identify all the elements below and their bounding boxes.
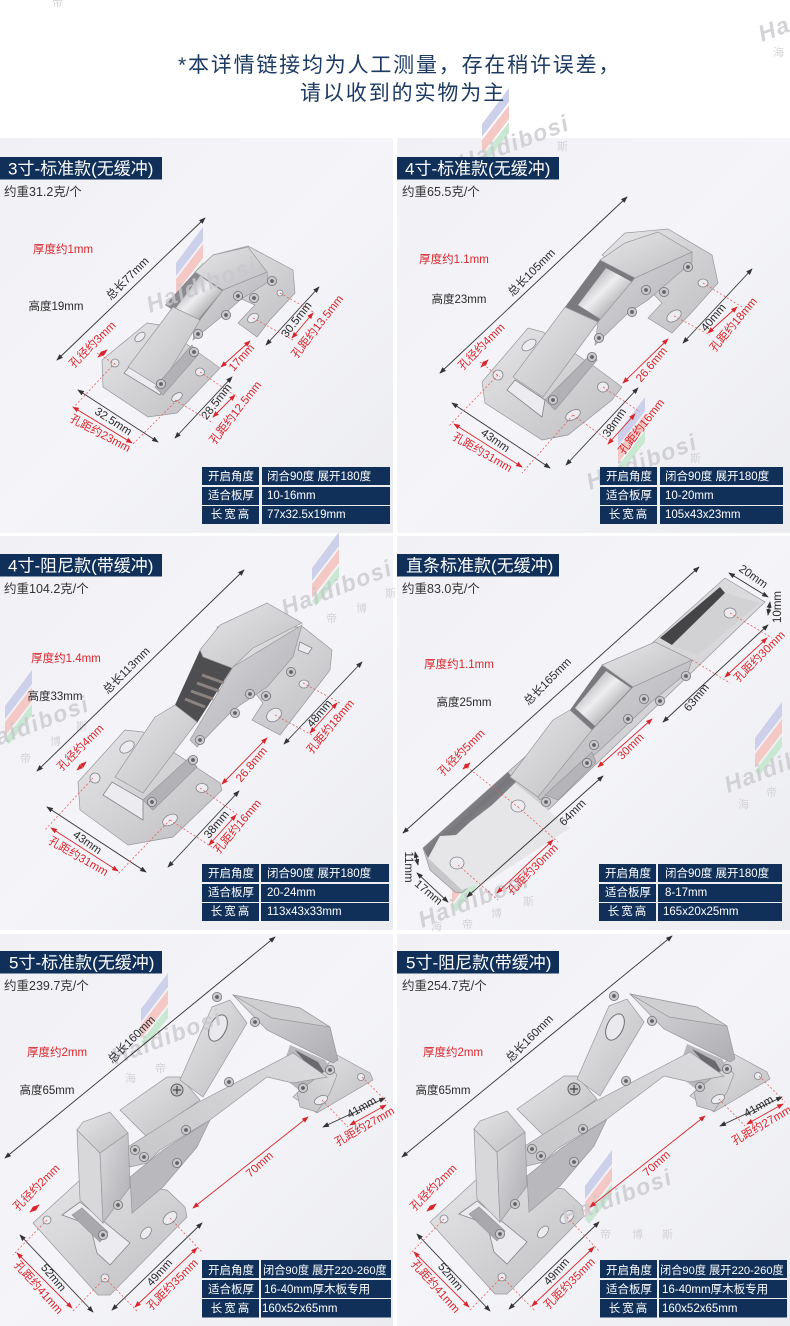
watermark text: Haidibosi [582,428,701,495]
spec table: 长宽高 [211,904,251,918]
spec table: 闭合90度 展开180度 [267,469,372,483]
dimension labels: 孔径约4mm [54,721,107,774]
dimension labels: 41mm [345,1095,379,1121]
dimension labels: 孔距约30mm [504,841,561,898]
panel: 5寸 standard [0,934,397,1326]
dimension lines [403,567,772,902]
dimension labels: 52mm [38,1262,68,1294]
dimension labels: 64mm [557,797,589,829]
dimension lines [440,197,752,473]
thickness and height labels: 厚度约1.1mm [419,252,489,266]
thickness and height labels: 高度65mm [416,1083,470,1097]
spec table: 10-16mm [267,490,316,502]
dimension labels: 孔距约16mm [615,396,667,457]
dimension labels: 26.6mm [634,345,670,385]
watermarks: 海 [431,919,442,933]
dimension labels: 孔径约2mm [10,1161,63,1214]
dimension labels: 17mm [412,878,444,908]
thickness and height labels: 厚度约1.4mm [31,651,101,665]
spec table: 开启角度 [208,866,254,880]
dimension labels: 43mm [478,427,512,455]
spec table: 适合板厚 [606,1282,652,1296]
watermark: 斯 [662,1228,673,1241]
spec table [600,1260,787,1318]
watermarks: Haidibosi [414,866,533,933]
spec table: 长宽高 [211,507,251,521]
spec table: 适合板厚 [606,488,652,502]
spec table: 适合板厚 [605,885,651,899]
thickness and height labels [28,651,101,703]
spec table: 闭合90度 展开180度 [665,469,770,483]
watermark: top corners [52,0,790,59]
dimension labels: 49mm [145,1257,175,1289]
dimension labels: 10mm [772,591,784,623]
watermark stripes [176,227,203,301]
watermark stripes: 海 [125,1071,136,1085]
heading note: *本详情链接均为人工测量，存在稍许误差， [178,54,621,77]
thickness and height labels [20,1045,87,1097]
weight: 约重239.7克/个 [4,978,89,993]
dimension labels: 孔距约31mm [46,833,111,879]
spec table: 165x20x25mm [663,906,738,918]
spec table: 160x52x65mm [262,1303,337,1315]
watermarks [414,702,790,933]
dimension labels: 28.5mm [200,382,235,422]
spec table: 长宽高 [609,1301,649,1315]
title bar: 3寸-标准款(无缓冲) [8,160,153,178]
title bar: 5寸-标准款(无缓冲) [9,954,154,972]
thickness and height labels [29,242,93,313]
weight: 约重31.2克/个 [4,184,82,199]
thickness and height labels: 高度33mm [28,689,82,703]
watermark: top over panel edge: Haidibosi [454,109,573,176]
watermarks: 帝 [20,751,31,765]
dimension labels: 20mm [736,563,770,591]
panel: 5寸 damping [397,934,790,1326]
dimension labels: 70mm [641,1149,673,1179]
dimension lines [402,936,785,1311]
watermark: top over panel edge: 斯 [557,140,568,153]
dimension labels: 孔距约16mm [211,796,264,856]
spec table: 16-40mm厚木板专用 [264,1282,370,1296]
dimension labels: 孔径约5mm [435,726,488,779]
weight: 约重254.7克/个 [402,978,487,993]
spec table: 8-17mm [665,887,707,899]
dimension labels: 孔距约41mm [11,1258,66,1317]
thickness and height labels: 高度23mm [432,292,486,306]
dimension labels: 总长165mm [521,655,574,708]
watermarks: 博 [50,735,61,748]
spec table [202,467,390,524]
dimension labels: 总长113mm [100,644,153,697]
dimension labels: 41mm [742,1094,776,1120]
dimension labels: 孔距约13.5mm [288,292,346,361]
spec table: 160x52x65mm [662,1303,737,1315]
dimension labels: 48mm [305,698,335,730]
dimension labels: 孔距约12.5mm [206,378,264,447]
watermark: 帝 [600,1227,611,1241]
dimension labels: 总长160mm [105,1013,158,1066]
watermark stripes: 帝 [155,1061,166,1075]
dimension labels: 49mm [542,1256,572,1288]
watermark text: Haidibosi [107,1003,226,1070]
hinge photo [33,992,373,1295]
spec table: 开启角度 [605,866,651,880]
thickness and height labels: 厚度约1mm [33,242,93,256]
dimension labels: 孔距约27mm [332,1103,397,1149]
thickness and height labels: 高度19mm [29,299,83,313]
spec table: 77x32.5x19mm [267,509,346,521]
watermark stripes [125,973,168,1085]
spec table: 20-24mm [267,887,316,899]
dimension labels: 孔径约3mm [66,318,119,371]
dimension labels: 52mm [435,1261,465,1293]
dimension labels: 43mm [70,829,104,857]
heading note [178,54,621,105]
spec table: 闭合90度 展开180度 [267,866,372,880]
watermark text: Haidibosi [142,251,261,318]
dimension labels: 38mm [202,809,232,841]
weight: 约重104.2克/个 [4,581,89,596]
dimension labels: 63mm [682,682,712,714]
panel: 4寸 damping [0,532,396,930]
weight: 约重83.0克/个 [402,581,480,596]
dimension labels: 30.5mm [280,300,315,340]
dimension labels [46,644,357,879]
thickness and height labels: 高度65mm [20,1083,74,1097]
dimension lines [37,570,362,875]
spec table: 10-20mm [665,490,714,502]
watermarks [0,532,396,765]
watermarks: 帝 [326,611,337,625]
watermarks: 帝 [766,785,777,799]
dimension labels: 孔距约35mm [144,1256,201,1313]
thickness and height labels [424,657,494,709]
spec table: 适合板厚 [208,488,254,502]
spec table: 开启角度 [606,469,652,483]
dimension labels: 孔距约31mm [450,429,515,475]
watermarks: 博 [491,907,502,920]
spec table: 闭合90度 展开180度 [665,866,770,880]
heading note: 请以收到的实物为主 [300,82,506,105]
watermark: 博 [632,1228,643,1241]
dimension labels: 32.5mm [92,406,134,438]
hinge photo [430,991,770,1294]
dimension labels: 孔距约30mm [731,628,788,685]
watermark: top corners: 海 [773,45,784,59]
spec table: 闭合90度 展开220-260度 [660,1263,784,1277]
dimension labels: 孔距约23mm [68,411,133,455]
spec table: 16-40mm厚木板专用 [662,1282,768,1296]
dimension labels: 总长160mm [503,1012,556,1065]
thickness and height labels: 厚度约2mm [27,1045,87,1059]
spec table [202,864,389,921]
spec table: 适合板厚 [208,1282,254,1296]
watermarks: 帝 [462,917,473,931]
watermark text: 斯 [690,452,701,465]
spec table [599,864,782,921]
dimension labels: 孔距约18mm [707,294,760,354]
dimension labels: 孔距约35mm [541,1255,598,1312]
hinge photo [423,578,765,893]
hinge photo [102,246,295,417]
dimension labels [402,563,788,908]
spec table [600,467,783,524]
dimension labels: 70mm [244,1150,276,1180]
dimension labels: 总长105mm [505,246,558,299]
watermarks: 海 [738,797,749,811]
dimension labels: 30mm [615,731,647,763]
spec table: 长宽高 [609,507,649,521]
hinge photo [482,229,718,440]
spec table: 长宽高 [608,904,648,918]
watermarks: 斯 [523,895,534,908]
thickness and height labels: 厚度约2mm [423,1045,483,1059]
thickness and height labels [416,1045,483,1097]
dimension labels [66,254,346,455]
weight: 约重65.5克/个 [402,184,480,199]
dimension labels [407,1012,790,1316]
spec table: 闭合90度 展开220-260度 [263,1263,387,1277]
dimension labels: 11mm [402,851,414,883]
watermarks: Haidibosi [277,554,396,621]
thickness and height labels: 高度25mm [437,695,491,709]
spec table: 长宽高 [211,1301,251,1315]
hinge photo [78,603,332,845]
watermarks: 斯 [76,720,87,733]
dimension labels: 26.8mm [234,745,270,785]
title bar: 4寸-阻尼款(带缓冲) [8,556,153,576]
dimension labels: 孔距约18mm [304,696,357,756]
dimension labels: 孔径约4mm [455,320,508,373]
spec table: 105x43x23mm [665,509,740,521]
panel: 3寸 standard [0,138,393,533]
spec table: 适合板厚 [208,885,254,899]
dimension labels: 孔距约41mm [408,1257,463,1316]
title bar: 直条标准款(无缓冲) [406,556,553,576]
thickness and height labels: 厚度约1.1mm [424,657,494,671]
dimension labels: 孔径约2mm [407,1161,460,1214]
thickness and height labels [419,252,489,306]
dimension labels [10,1013,397,1317]
spec table: 开启角度 [208,469,254,483]
panel: 4寸 standard [397,88,790,533]
watermark stripes [618,397,645,471]
panel: straight standard [397,536,790,933]
spec table: 开启角度 [208,1263,254,1277]
spec table [202,1260,391,1318]
dimension lines [5,937,388,1312]
title bar: 5寸-阻尼款(带缓冲) [406,954,551,972]
dimension labels: 38mm [601,406,629,440]
spec table: 113x43x33mm [267,906,342,918]
dimension labels: 40mm [699,302,729,334]
dimension lines [57,218,319,445]
dimension labels: 总长77mm [103,254,152,303]
watermark: Haidibosi [557,1163,676,1230]
title bar: 4寸-标准款(无缓冲) [405,160,550,178]
watermarks: 斯 [385,587,396,600]
dimension labels: 17mm [227,342,257,374]
dimension labels [450,246,760,475]
watermarks: 博 [356,602,367,615]
spec table: 开启角度 [606,1263,652,1277]
